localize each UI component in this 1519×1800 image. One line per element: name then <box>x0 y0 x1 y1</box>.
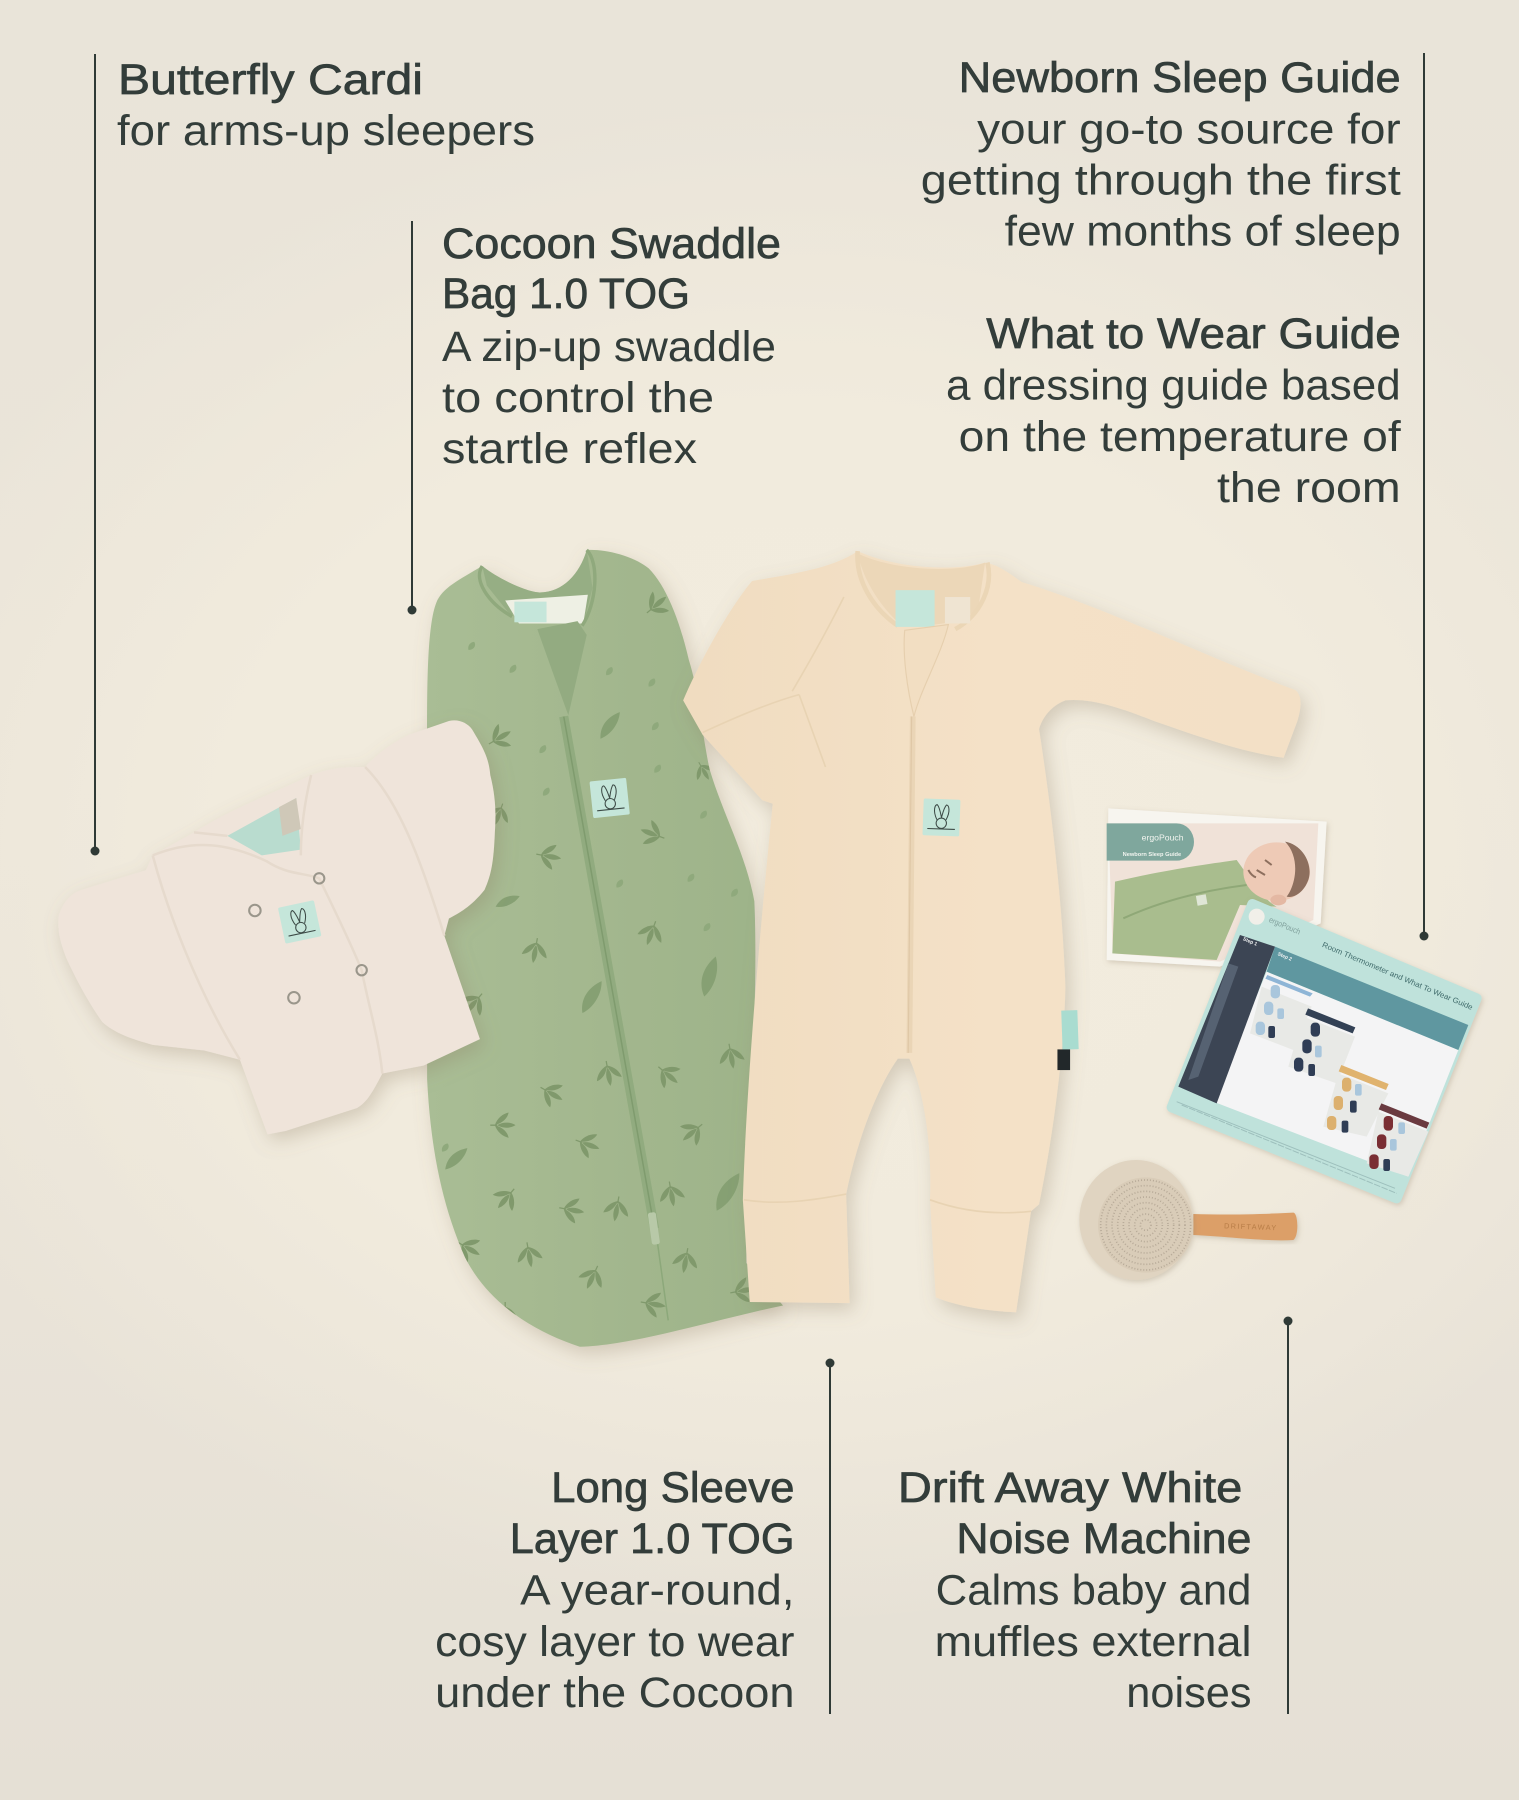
newborn sleep guide booklet: Newborn Sleep Guide <box>1123 852 1181 858</box>
callout: Newborn Sleep Guide and What to Wear Guide: on the temperature of <box>959 413 1402 461</box>
newborn sleep guide booklet <box>1107 808 1327 967</box>
callout: Newborn Sleep Guide and What to Wear Guide <box>921 53 1428 940</box>
room thermometer and what to wear guide card: Step 2 <box>1277 951 1293 963</box>
callout: Drift Away White Noise Machine: noises <box>1126 1669 1252 1717</box>
callout: Cocoon Swaddle Bag: startle reflex <box>442 425 698 473</box>
callout: Newborn Sleep Guide and What to Wear Guide: a dressing guide based <box>946 362 1401 410</box>
callout: Cocoon Swaddle Bag: Cocoon Swaddle <box>442 220 781 268</box>
callout: Newborn Sleep Guide and What to Wear Guide: Newborn Sleep Guide <box>959 54 1401 102</box>
callout: Drift Away White Noise Machine: Noise Machine <box>956 1515 1251 1563</box>
room thermometer and what to wear guide card: ergoPouch <box>1268 915 1302 936</box>
callout: Newborn Sleep Guide and What to Wear Guide: the room <box>1217 464 1401 512</box>
callout: Long Sleeve Layer: Layer 1.0 TOG <box>510 1515 794 1563</box>
room thermometer and what to wear guide card: Room Thermometer and What To Wear Guide <box>1321 940 1474 1012</box>
callout: Newborn Sleep Guide and What to Wear Guide: your go-to source for <box>977 106 1401 154</box>
callout: Long Sleeve Layer: Long Sleeve <box>551 1464 794 1512</box>
callout: Cocoon Swaddle Bag: to control the <box>442 374 714 422</box>
cocoon swaddle bag <box>427 550 783 1347</box>
speaker body <box>1079 1160 1193 1280</box>
callout: Butterfly Cardi: for arms-up sleepers <box>117 107 535 155</box>
long sleeve layer romper <box>683 551 1301 1312</box>
callout: Long Sleeve Layer <box>435 1358 834 1717</box>
product photo: garments <box>58 550 1301 1347</box>
callout: Drift Away White Noise Machine: muffles external <box>935 1618 1252 1666</box>
callout: Newborn Sleep Guide and What to Wear Guide: What to Wear Guide <box>986 310 1401 358</box>
callout: Drift Away White Noise Machine: Calms baby and <box>936 1566 1252 1614</box>
callout: Butterfly Cardi: Butterfly Cardi <box>118 56 423 104</box>
callout: Cocoon Swaddle Bag: A zip-up swaddle <box>442 323 776 371</box>
callout: Long Sleeve Layer: under the Cocoon <box>435 1669 794 1717</box>
callout: Long Sleeve Layer: cosy layer to wear <box>435 1618 794 1666</box>
butterfly cardi <box>58 720 495 1134</box>
strap: DRIFTAWAY <box>1224 1221 1278 1232</box>
drift away white noise machine <box>1079 1160 1297 1280</box>
callout: Cocoon Swaddle Bag: Bag 1.0 TOG <box>442 270 690 318</box>
strap <box>1193 1213 1297 1240</box>
newborn sleep guide booklet: ergoPouch <box>1142 833 1184 843</box>
callout: Drift Away White Noise Machine: Drift Away White <box>898 1464 1242 1512</box>
callout: Newborn Sleep Guide and What to Wear Guide: getting through the first <box>921 156 1401 204</box>
callout: Butterfly Cardi <box>90 54 535 856</box>
callout: Drift Away White Noise Machine <box>898 1316 1292 1717</box>
callout: Newborn Sleep Guide and What to Wear Guide: few months of sleep <box>1005 208 1401 256</box>
room thermometer and what to wear guide card <box>1172 904 1477 1198</box>
callout: Cocoon Swaddle Bag <box>408 220 781 614</box>
callout: Long Sleeve Layer: A year-round, <box>520 1566 794 1614</box>
room thermometer and what to wear guide card: Step 1 <box>1242 936 1258 948</box>
